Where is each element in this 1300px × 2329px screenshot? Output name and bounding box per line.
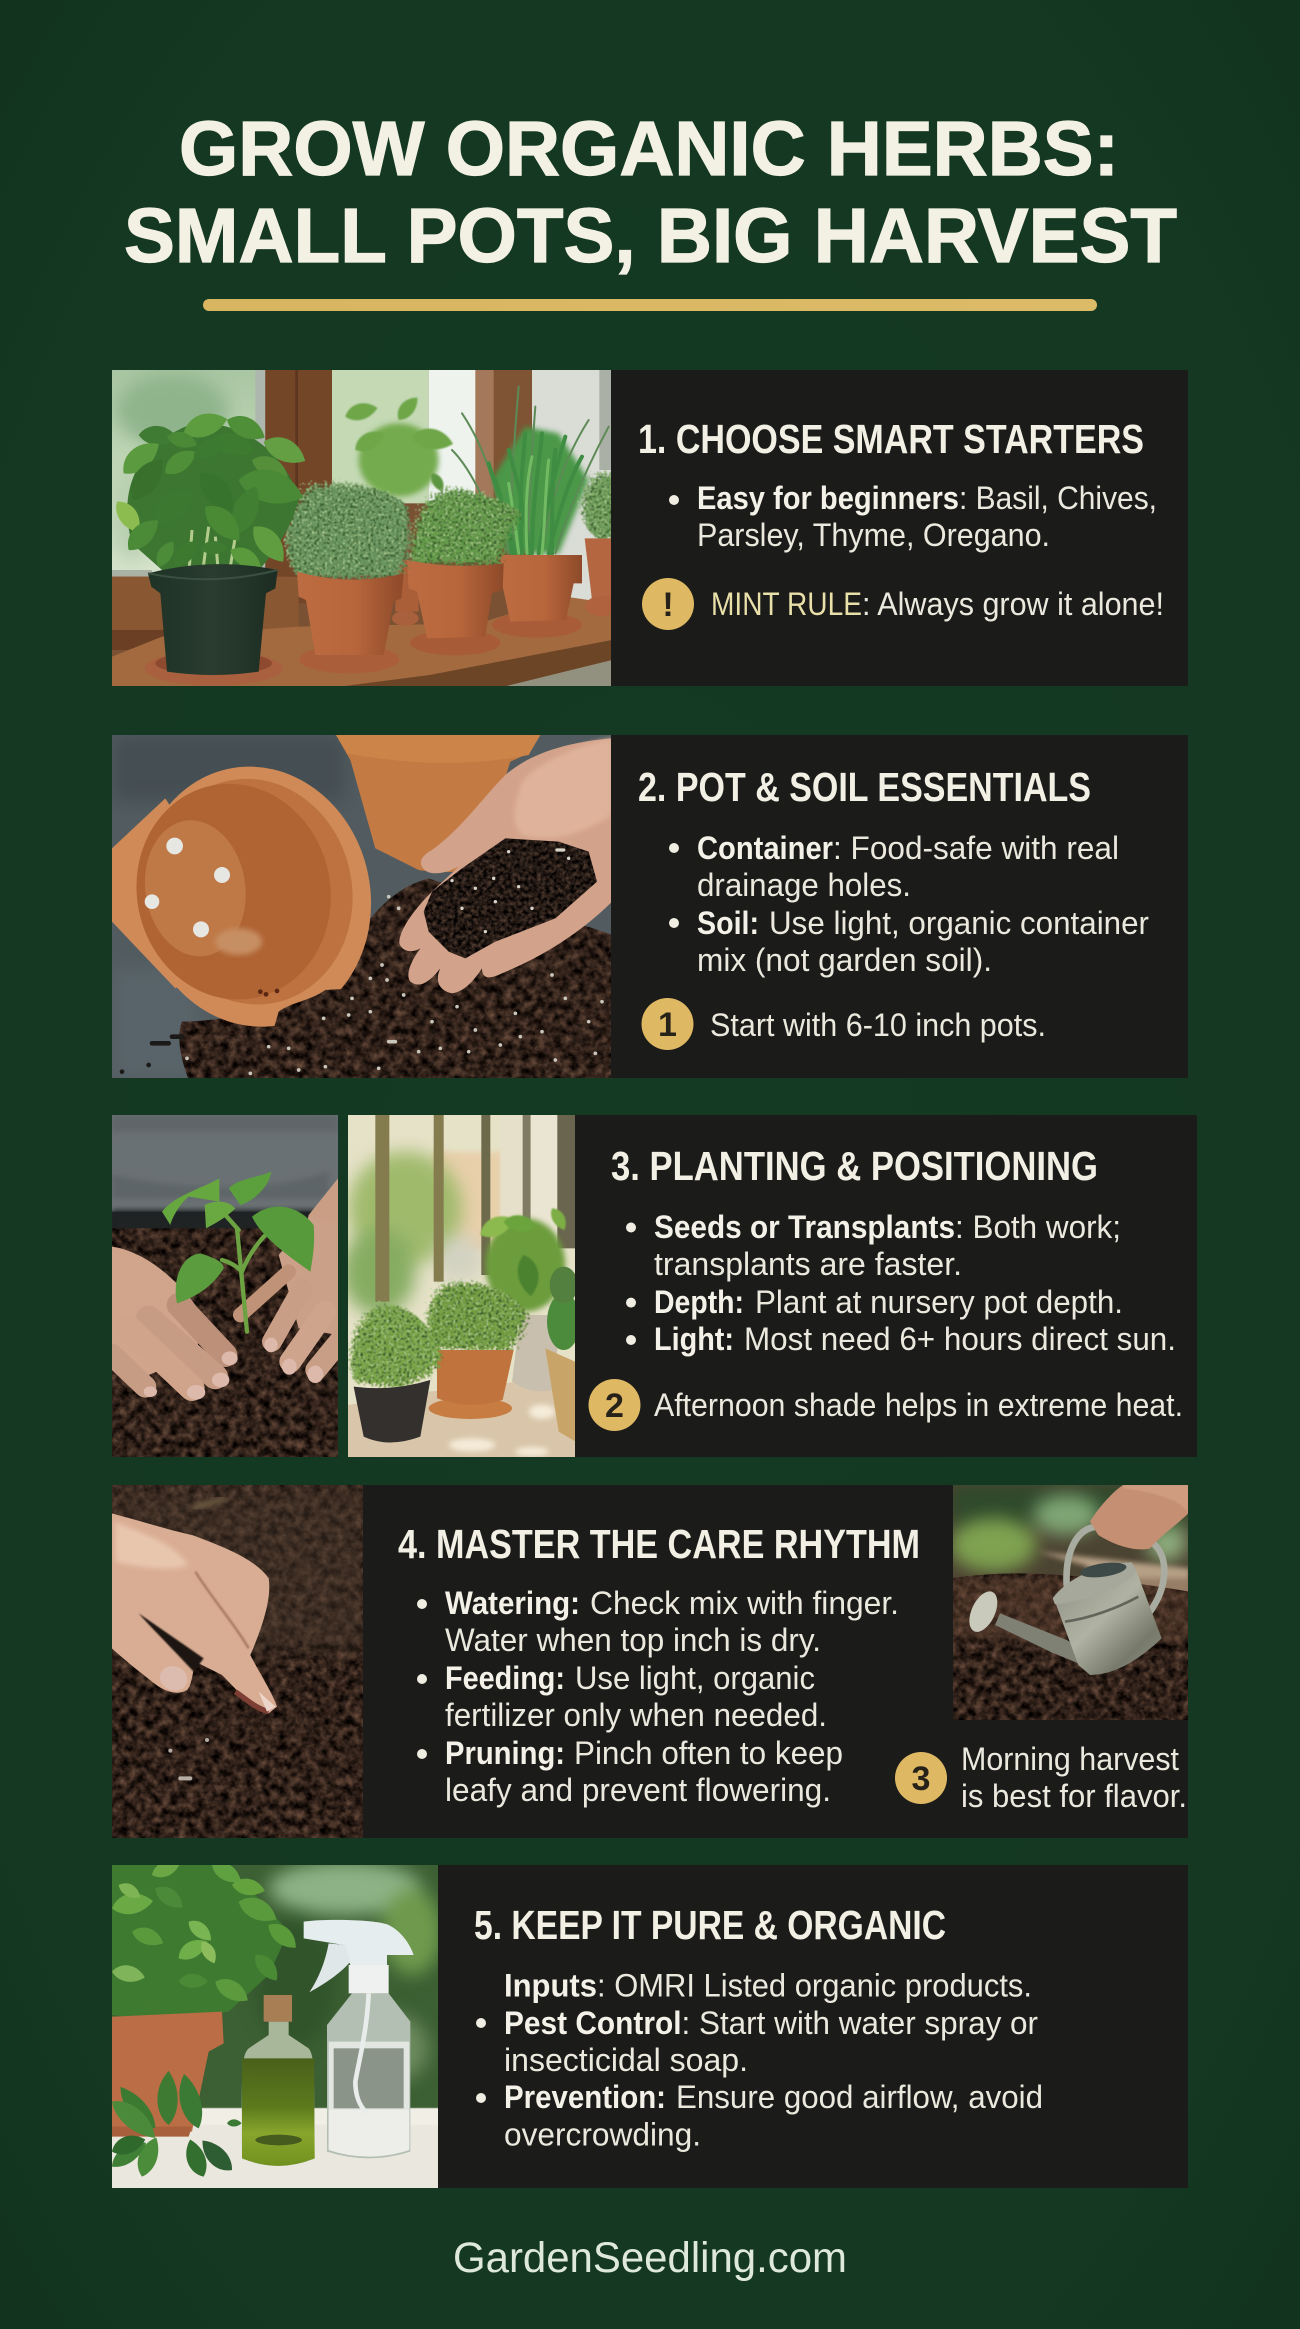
bullet list: inputs, pest control, prevention bbox=[476, 1968, 1043, 2152]
bullet list: seeds, depth, light: Seeds or Transplants bbox=[654, 1209, 955, 1245]
panel: 4 master the care rhythm bbox=[112, 1485, 1190, 1840]
bullet list: inputs, pest control, prevention: Pest Control bbox=[504, 2005, 682, 2041]
left hand bbox=[112, 1246, 338, 1401]
thyme bbox=[286, 484, 410, 578]
heading: 4. master the care rhythm: 4. MASTER THE CARE RHYTHM bbox=[398, 1521, 920, 1567]
bullet list: seeds, depth, light bbox=[626, 1209, 1176, 1357]
footer: website: GardenSeedling.com bbox=[453, 2234, 847, 2282]
pot 2 bbox=[300, 650, 399, 674]
can body bbox=[1055, 1572, 1162, 1675]
photo: herb pot, oil bottle and spray bottle bbox=[106, 1857, 442, 2188]
hand bbox=[399, 738, 612, 993]
terracotta pot bbox=[112, 2012, 224, 2132]
bullet list: inputs, pest control, prevention: Ensure good airflow, avoid bbox=[676, 2079, 1043, 2115]
callout: mint rule: ! bbox=[662, 586, 674, 624]
bullet list: container and soil bbox=[669, 830, 1149, 978]
panel: 1 choose smart starters bbox=[109, 370, 1188, 687]
seedling bbox=[222, 1215, 267, 1332]
photo: watering can on soil bbox=[950, 1485, 1190, 1725]
bullet list: beginners bbox=[669, 480, 1157, 553]
soil in palm bbox=[424, 838, 597, 958]
photo: herbs in pots on a windowsill bbox=[109, 370, 629, 687]
dark pot bbox=[148, 564, 278, 675]
title: GROW ORGANIC HERBS: bbox=[179, 106, 1119, 192]
bullet list: watering, feeding, pruning: Check mix with finger. bbox=[590, 1585, 899, 1621]
photo: finger testing soil bbox=[112, 1485, 365, 1840]
tip 3: Morning harvest bbox=[961, 1741, 1179, 1777]
bullet list: watering, feeding, pruning: fertilizer only when needed. bbox=[445, 1697, 827, 1733]
tip 2: Afternoon shade helps in extreme heat. bbox=[654, 1387, 1183, 1423]
tip 2 bbox=[588, 1379, 1183, 1431]
panel: 2 pot and soil essentials bbox=[112, 735, 1188, 1080]
oregano bbox=[411, 490, 522, 565]
bullet list: beginners: : Basil, Chives, bbox=[959, 480, 1157, 516]
panel: 3 planting and positioning bbox=[112, 1115, 1197, 1462]
heading: 2. pot and soil essentials: 2. POT & SOIL ESSENTIALS bbox=[638, 764, 1091, 810]
chives bbox=[494, 427, 589, 553]
pot 3 bbox=[410, 633, 500, 656]
hand bbox=[1090, 1485, 1188, 1549]
bullet list: watering, feeding, pruning bbox=[417, 1585, 899, 1808]
bullet list: watering, feeding, pruning: Water when top inch is dry. bbox=[445, 1622, 821, 1658]
perlite specks bbox=[187, 897, 602, 1073]
callout: mint rule: : Always grow it alone! bbox=[862, 586, 1164, 622]
bullet list: inputs, pest control, prevention: : Start with water spray or bbox=[682, 2005, 1038, 2041]
can spout bbox=[995, 1613, 1082, 1663]
heading: 5. keep it pure and organic: 5. KEEP IT PURE & ORGANIC bbox=[474, 1902, 946, 1948]
callout: mint rule bbox=[642, 578, 1164, 630]
back pot bbox=[336, 735, 540, 872]
tip 1: Start with 6-10 inch pots. bbox=[710, 1007, 1046, 1043]
bullet list: watering, feeding, pruning: leafy and prevent flowering. bbox=[445, 1772, 831, 1808]
bullet list: beginners: Parsley, Thyme, Oregano. bbox=[697, 517, 1050, 553]
title: SMALL POTS, BIG HARVEST bbox=[124, 193, 1177, 279]
soil pile bbox=[179, 878, 612, 1080]
title bbox=[124, 106, 1177, 279]
can handle bbox=[1067, 1527, 1164, 1612]
bullet list: seeds, depth, light: Plant at nursery pot depth. bbox=[755, 1284, 1123, 1320]
bullet list: inputs, pest control, prevention: insecticidal soap. bbox=[504, 2042, 748, 2078]
callout: mint rule: MINT RULE bbox=[711, 586, 862, 622]
bullet list: inputs, pest control, prevention: Prevention: bbox=[504, 2079, 666, 2115]
bullet list: seeds, depth, light: transplants are faster. bbox=[654, 1246, 962, 1282]
bullet list: inputs, pest control, prevention: : OMRI Listed organic products. bbox=[597, 1968, 1032, 2004]
bullet list: inputs, pest control, prevention: Inputs bbox=[504, 1968, 597, 2004]
spray bottle bbox=[327, 1993, 410, 2158]
basil leaves bbox=[116, 414, 306, 567]
dark pot saucer bbox=[145, 656, 282, 686]
basil mass bbox=[127, 424, 299, 570]
tip 1: 1 bbox=[658, 1006, 677, 1044]
pot 4 bbox=[492, 615, 582, 638]
bullet list: watering, feeding, pruning: Use light, organic bbox=[575, 1660, 815, 1696]
photo: tipped terracotta pot and hand with soil bbox=[112, 735, 612, 1080]
tip 3 bbox=[895, 1741, 1187, 1814]
back herb and pot bbox=[512, 1315, 562, 1391]
bullet list: container and soil: Use light, organic container bbox=[769, 905, 1149, 941]
right hand bbox=[278, 1250, 338, 1334]
herb foliage bbox=[112, 1865, 289, 2022]
back pot bbox=[395, 560, 419, 612]
tipped pot bbox=[112, 798, 177, 988]
bullet list: beginners: Easy for beginners bbox=[697, 480, 959, 516]
gold title rule bbox=[203, 299, 1097, 311]
right plant & pot bbox=[577, 470, 611, 538]
tip 2: 2 bbox=[605, 1387, 624, 1425]
photo: hands planting a seedling bbox=[112, 1115, 342, 1462]
bullet list: container and soil: drainage holes. bbox=[697, 867, 911, 903]
bullet list: seeds, depth, light: : Both work; bbox=[955, 1209, 1121, 1245]
bullet list: seeds, depth, light: Most need 6+ hours direct sun. bbox=[744, 1321, 1176, 1357]
thyme 2 bbox=[427, 1283, 527, 1350]
tip 3: 3 bbox=[912, 1760, 930, 1798]
tip 1 bbox=[642, 998, 1046, 1050]
basil stems bbox=[188, 526, 236, 566]
panel: 5 keep it pure and organic bbox=[106, 1857, 1188, 2188]
bullet list: inputs, pest control, prevention: overcrowding. bbox=[504, 2116, 701, 2152]
bullet list: container and soil: : Food-safe with real bbox=[833, 830, 1119, 866]
photo: herbs on sunny balcony bbox=[342, 1115, 580, 1458]
oil bottle bbox=[242, 2022, 315, 2166]
bullet list: container and soil: mix (not garden soil). bbox=[697, 942, 992, 978]
thyme 1 bbox=[351, 1305, 442, 1387]
bullet list: watering, feeding, pruning: Watering: bbox=[445, 1585, 580, 1621]
bullet list: watering, feeding, pruning: Feeding: bbox=[445, 1660, 565, 1696]
bullet list: watering, feeding, pruning: Pruning: bbox=[445, 1735, 565, 1771]
cut leaves bbox=[106, 2071, 242, 2180]
tip 3: is best for flavor. bbox=[961, 1778, 1187, 1814]
back mint bbox=[359, 423, 439, 497]
bullet list: seeds, depth, light: Light: bbox=[654, 1321, 734, 1357]
heading: 1. choose smart starters: 1. CHOOSE SMART STARTERS bbox=[638, 416, 1144, 462]
bullet list: seeds, depth, light: Depth: bbox=[654, 1284, 744, 1320]
bullet list: container and soil: Soil: bbox=[697, 905, 759, 941]
heading: 3. planting and positioning: 3. PLANTING & POSITIONING bbox=[611, 1143, 1098, 1189]
bullet list: watering, feeding, pruning: Pinch often to keep bbox=[574, 1735, 843, 1771]
bullet list: container and soil: Container bbox=[697, 830, 833, 866]
